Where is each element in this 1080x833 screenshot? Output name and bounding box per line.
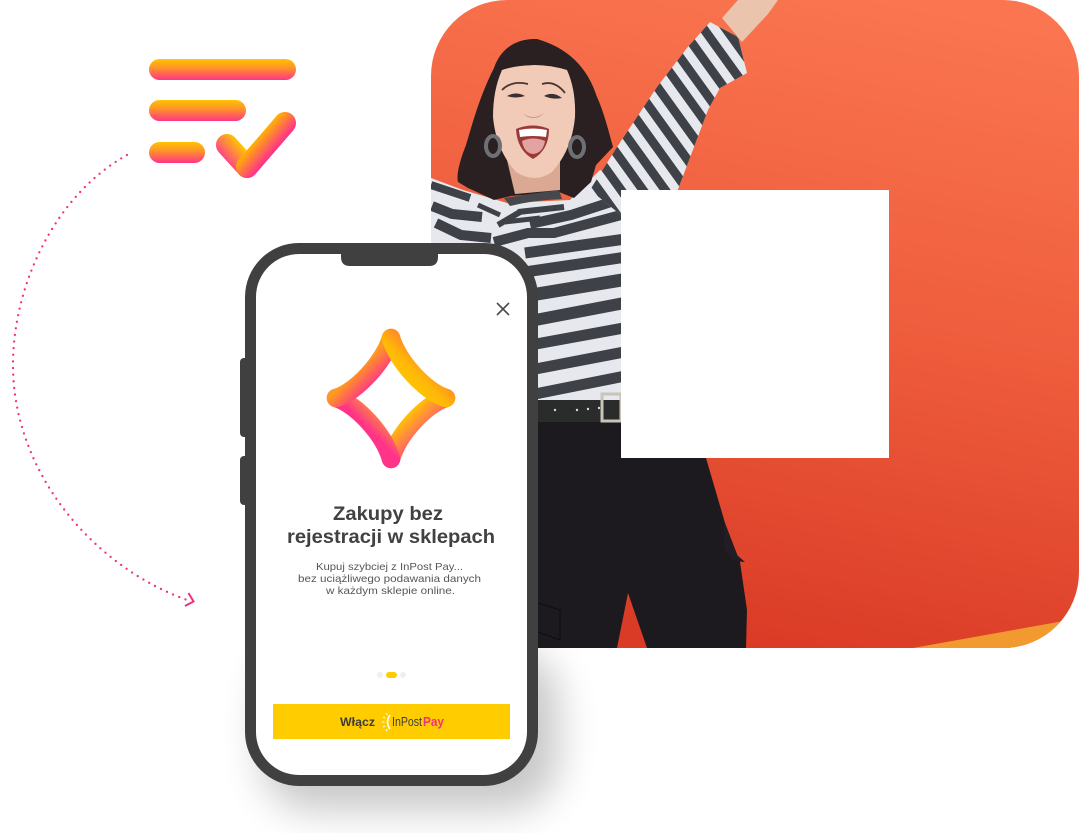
body text: w każdym sklepie online. xyxy=(325,585,455,597)
raised hand xyxy=(722,0,778,42)
side buttons xyxy=(240,358,252,505)
button: Włącz InPost Pay: Pay xyxy=(423,715,444,729)
shirt torso xyxy=(431,170,621,400)
eyebrows xyxy=(502,83,565,93)
notch xyxy=(341,253,438,266)
hair xyxy=(457,39,613,200)
dotted arrow arc xyxy=(13,155,194,606)
phone body xyxy=(245,243,538,786)
belt xyxy=(530,394,625,422)
body text: Kupuj szybciej z InPost Pay... xyxy=(316,561,463,573)
body text xyxy=(298,561,481,597)
icon: checklist with tick xyxy=(149,59,296,167)
phone mockup xyxy=(240,243,538,786)
phone screen xyxy=(256,254,527,775)
neck xyxy=(507,160,560,194)
photo panel: woman cheering on orange wall xyxy=(431,0,1080,648)
icon: InPost Pay star xyxy=(336,338,446,459)
shirt arm xyxy=(592,22,747,215)
fringe xyxy=(520,65,533,66)
icon: close xyxy=(497,303,509,315)
white square overlay xyxy=(621,190,889,458)
earrings xyxy=(486,136,500,156)
eyes xyxy=(507,94,562,99)
nose xyxy=(523,113,544,118)
heading xyxy=(287,504,495,548)
face xyxy=(493,65,575,178)
body text: bez uciążliwego podawania danych xyxy=(298,573,481,585)
open mouth xyxy=(516,126,549,159)
heading: Zakupy bez xyxy=(333,504,443,525)
pagination dots xyxy=(377,672,406,678)
icon: sun mark xyxy=(382,713,390,731)
orange corner wedge xyxy=(914,622,1060,648)
heading: rejestracji w sklepach xyxy=(287,527,495,548)
shirt collar xyxy=(504,190,562,206)
button: Włącz InPost Pay xyxy=(273,704,510,739)
black trousers xyxy=(530,420,747,648)
button: Włącz InPost Pay: Włącz xyxy=(340,717,375,729)
phone shadow xyxy=(262,650,558,810)
button: Włącz InPost Pay: InPost xyxy=(392,715,422,729)
